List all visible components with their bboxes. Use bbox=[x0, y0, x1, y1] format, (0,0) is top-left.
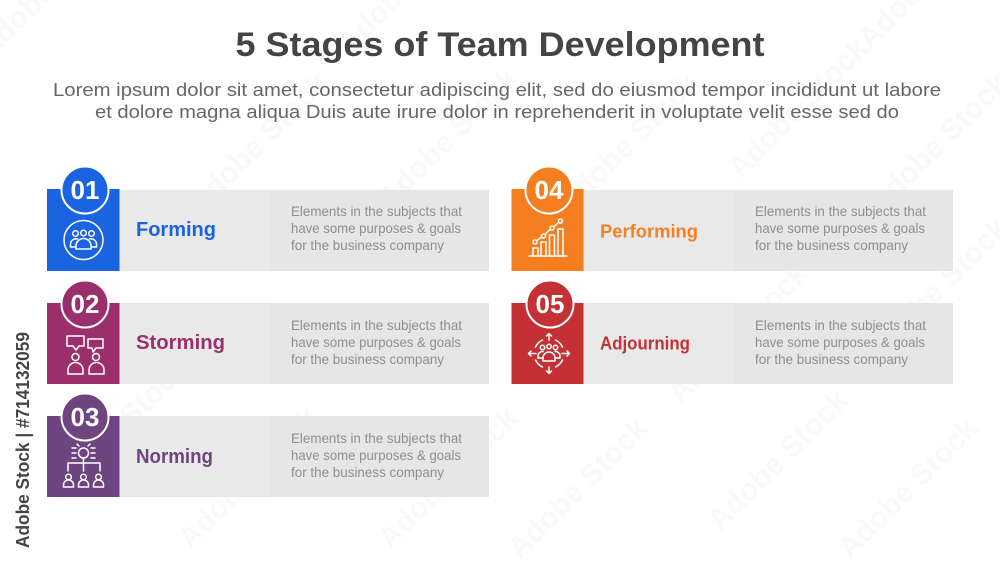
text: Adobe Stock bbox=[722, 32, 875, 185]
panel: stage 03 Norming: Norming bbox=[136, 446, 213, 468]
icon: team with outward arrows bbox=[528, 334, 570, 374]
panel: stage 01 Forming: Forming bbox=[136, 219, 216, 241]
panel: stage 05 Adjourning: 05 bbox=[536, 289, 564, 319]
panel: stage 03 Norming: have some purposes & goals bbox=[291, 447, 461, 463]
panel: stage 01 Forming: 01 bbox=[71, 175, 99, 205]
icon: leader and team hierarchy bbox=[64, 444, 104, 487]
text: Adobe Stock bbox=[372, 402, 525, 555]
text: Adobe Stock bbox=[182, 67, 335, 220]
subtitle text: Lorem ipsum dolor sit amet, consectetur adipiscing elit, sed do eiusmod tempor incididunt ut labore bbox=[53, 79, 941, 100]
panel: stage 03 Norming: 03 bbox=[71, 402, 99, 432]
text: Adobe Stock bbox=[552, 67, 705, 220]
panel: stage 02 Storming: Storming bbox=[136, 332, 225, 354]
panel: stage 04 Performing: Performing bbox=[600, 220, 698, 242]
panel: stage 05 Adjourning: have some purposes & goals bbox=[755, 334, 925, 350]
text: Adobe Stock bbox=[172, 402, 325, 555]
panel: stage 02 Storming: have some purposes & goals bbox=[291, 334, 461, 350]
panel: stage 04 Performing: have some purposes & goals bbox=[755, 220, 925, 236]
text: Adobe Stock bbox=[372, 62, 525, 215]
panel: stage 01 Forming: have some purposes & goals bbox=[291, 220, 461, 236]
text: Adobe Stock bbox=[702, 384, 855, 537]
panel: stage 04 Performing: for the business company bbox=[755, 237, 908, 253]
panel: stage 04 Performing: Elements in the subjects that bbox=[755, 203, 926, 219]
panel: stage 05 Adjourning bbox=[512, 280, 953, 384]
panel: stage 04 Performing bbox=[512, 166, 953, 271]
panel: stage 05 Adjourning: for the business company bbox=[755, 351, 908, 367]
panel: stage 01 Forming bbox=[47, 166, 489, 271]
panel: stage 03 Norming: for the business company bbox=[291, 464, 444, 480]
subtitle text: et dolore magna aliqua Duis aute irure dolor in reprehenderit in voluptate velit esse sed do bbox=[95, 101, 899, 122]
panel: stage 03 Norming bbox=[47, 394, 489, 497]
panel: stage 01 Forming: Elements in the subjects that bbox=[291, 203, 462, 219]
panel: stage 02 Storming: Elements in the subjects that bbox=[291, 317, 462, 333]
panel: stage 02 Storming: 02 bbox=[71, 289, 99, 319]
text: Adobe Stock bbox=[832, 412, 985, 563]
panel: stage 03 Norming: Elements in the subjects that bbox=[291, 430, 462, 446]
title: 5 Stages of Team Development bbox=[236, 26, 764, 64]
icon: growth bar chart bbox=[529, 219, 567, 256]
text: Adobe Stock bbox=[42, 352, 195, 505]
subtitle text bbox=[53, 79, 941, 122]
panel: stage 02 Storming bbox=[47, 280, 489, 384]
panel: stage 02 Storming: for the business company bbox=[291, 351, 444, 367]
text: Adobe Stock bbox=[662, 257, 815, 410]
panel: stage 01 Forming: for the business company bbox=[291, 237, 444, 253]
panel: stage 05 Adjourning: Adjourning bbox=[600, 334, 690, 354]
stock id watermark: Adobe Stock | #714132059 bbox=[12, 332, 33, 548]
icon: team in circle bbox=[64, 220, 103, 260]
panel: stage 05 Adjourning: Elements in the subjects that bbox=[755, 317, 926, 333]
panel: stage 04 Performing: 04 bbox=[535, 175, 564, 205]
icon: two people talking bbox=[67, 336, 104, 374]
text: Adobe Stock bbox=[502, 412, 655, 563]
